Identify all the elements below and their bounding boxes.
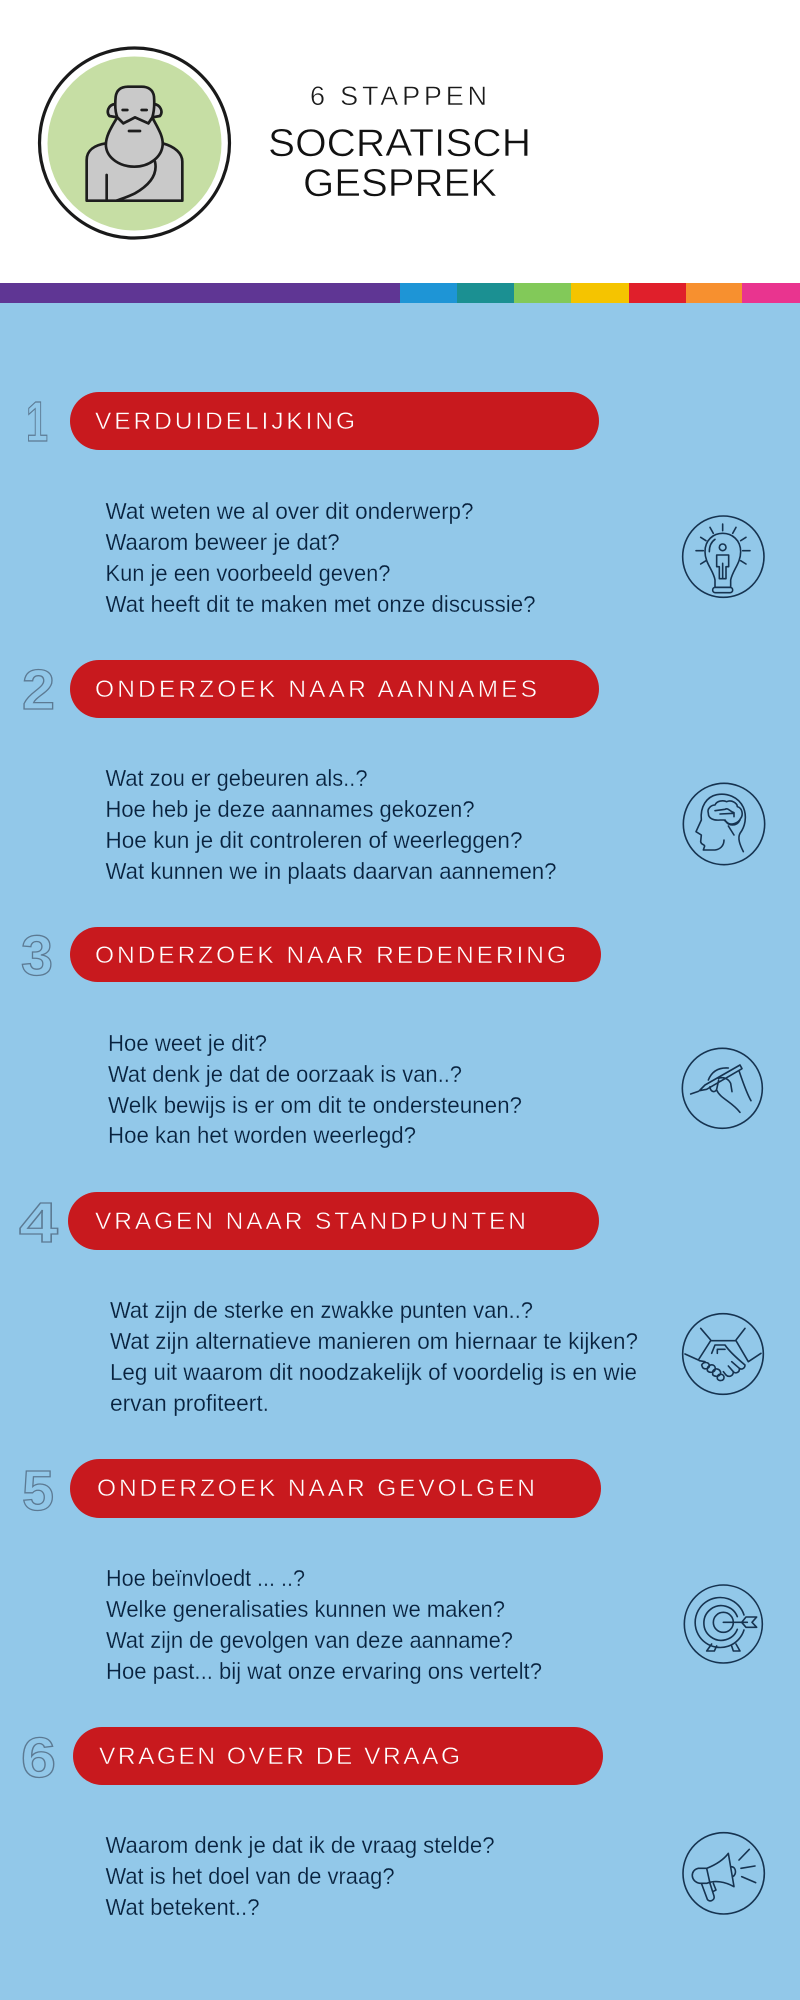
colour bar <box>0 283 800 303</box>
icon: Socrates portrait <box>40 48 230 238</box>
questions 4: Wat zijn de sterke en zwakke punten van..? <box>110 1297 533 1323</box>
step 6 panel <box>21 1726 764 1920</box>
questions 1: Wat heeft dit te maken met onze discussie? <box>106 591 536 617</box>
title: GESPREK <box>303 162 497 205</box>
step number 6: 6 <box>21 1726 56 1790</box>
questions 2: Wat kunnen we in plaats daarvan aannemen? <box>106 858 556 884</box>
step number 5: 5 <box>22 1459 54 1523</box>
step number 2: 2 <box>22 658 55 722</box>
heading pill 5: ONDERZOEK NAAR GEVOLGEN <box>97 1475 535 1502</box>
heading pill 1: VERDUIDELIJKING <box>95 408 355 435</box>
questions 6: Wat betekent..? <box>106 1894 260 1920</box>
icon: head with brain <box>683 783 765 865</box>
questions 2: Wat zou er gebeuren als..? <box>106 765 368 791</box>
questions 5: Wat zijn de gevolgen van deze aanname? <box>106 1627 513 1653</box>
title: SOCRATISCH <box>268 122 531 165</box>
heading pill 4: VRAGEN NAAR STANDPUNTEN <box>95 1208 526 1235</box>
heading pill 6: VRAGEN OVER DE VRAAG <box>99 1743 460 1770</box>
questions 1: Waarom beweer je dat? <box>106 529 340 555</box>
questions 3: Wat denk je dat de oorzaak is van..? <box>108 1061 462 1087</box>
step 1 panel <box>26 390 764 617</box>
step 4 panel <box>19 1191 763 1416</box>
questions 5: Welke generalisaties kunnen we maken? <box>106 1596 505 1622</box>
heading pill 3: ONDERZOEK NAAR REDENERING <box>95 942 566 969</box>
icon: hand with pen <box>682 1048 762 1128</box>
heading pill 3 <box>70 927 601 982</box>
heading pill 4 <box>68 1192 599 1250</box>
questions 2: Hoe kun je dit controleren of weerleggen? <box>106 827 522 853</box>
questions 1: Wat weten we al over dit onderwerp? <box>106 498 474 524</box>
questions 1 <box>106 498 536 617</box>
questions 4: Leg uit waarom dit noodzakelijk of voordelig is en wie <box>110 1359 637 1385</box>
heading pill 2 <box>70 660 599 718</box>
questions 3: Hoe weet je dit? <box>108 1030 267 1056</box>
questions 4: ervan profiteert. <box>110 1390 269 1416</box>
step 2 panel <box>22 658 765 884</box>
heading pill 6 <box>73 1727 603 1785</box>
title kicker: 6 STAPPEN <box>310 81 487 111</box>
header panel <box>40 48 531 238</box>
questions 3: Welk bewijs is er om dit te ondersteunen? <box>108 1092 522 1118</box>
questions 1: Kun je een voorbeeld geven? <box>106 560 390 586</box>
questions 5 <box>106 1565 542 1684</box>
questions 6: Wat is het doel van de vraag? <box>106 1863 394 1889</box>
questions 4: Wat zijn alternatieve manieren om hiernaar te kijken? <box>110 1328 638 1354</box>
title <box>268 122 531 205</box>
icon: megaphone <box>683 1833 764 1914</box>
icon: handshake <box>683 1314 763 1394</box>
icon: target with arrow <box>684 1585 762 1663</box>
step number 1: 1 <box>26 390 48 454</box>
heading pill 1 <box>70 392 599 450</box>
questions 5: Hoe past... bij wat onze ervaring ons vertelt? <box>106 1658 542 1684</box>
questions 6 <box>106 1832 494 1920</box>
step number 4: 4 <box>19 1191 58 1255</box>
icon: light bulb with person <box>683 516 764 597</box>
questions 2: Hoe heb je deze aannames gekozen? <box>106 796 474 822</box>
questions 6: Waarom denk je dat ik de vraag stelde? <box>106 1832 494 1858</box>
questions 3 <box>108 1030 522 1148</box>
questions 2 <box>106 765 556 884</box>
questions 5: Hoe beïnvloedt ... ..? <box>106 1565 305 1591</box>
step number 3: 3 <box>21 924 53 988</box>
heading pill 5 <box>70 1459 601 1518</box>
questions 4 <box>110 1297 638 1416</box>
step 5 panel <box>22 1459 762 1684</box>
questions 3: Hoe kan het worden weerlegd? <box>108 1122 416 1148</box>
heading pill 2: ONDERZOEK NAAR AANNAMES <box>95 676 537 703</box>
step 3 panel <box>21 924 762 1148</box>
